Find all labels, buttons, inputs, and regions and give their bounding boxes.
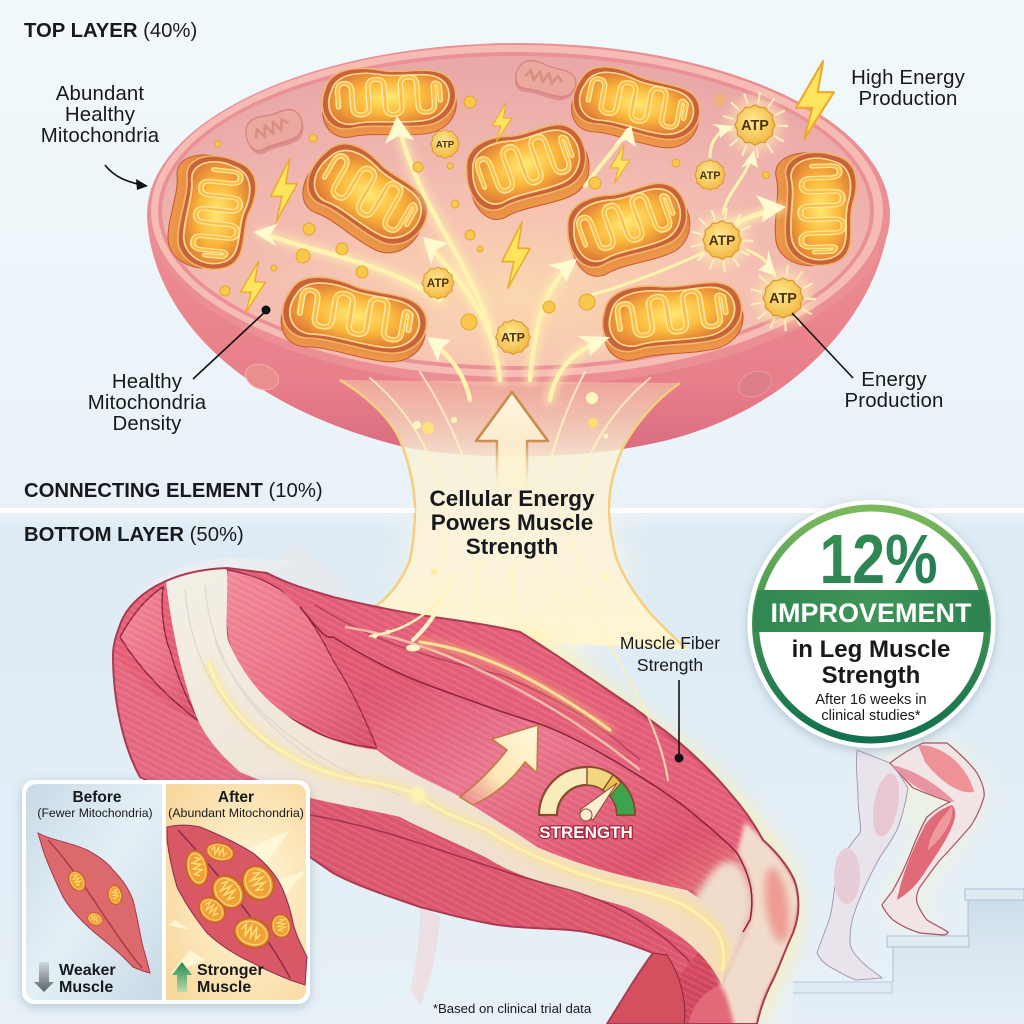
mitochondrion: centre right	[557, 169, 699, 285]
ATP badges: ATP	[427, 278, 449, 290]
ATP badges	[422, 98, 810, 354]
text: stronger muscle: Muscle	[197, 979, 251, 996]
heading: bottom layer: BOTTOM LAYER (50%)	[24, 524, 244, 546]
text: weaker muscle: Muscle	[59, 979, 113, 996]
heading: top layer: TOP LAYER (40%)	[24, 20, 197, 42]
panel: cell cross-section dish	[147, 43, 890, 456]
label: muscle fiber strength	[620, 633, 720, 762]
badge: 12% improvement: IMPROVEMENT	[770, 598, 972, 628]
white tendon band	[165, 567, 732, 985]
ATP badges: ATP	[741, 118, 769, 134]
text: after: After	[218, 789, 254, 806]
rear leg	[817, 750, 908, 980]
ATP badges: ATP	[436, 140, 454, 151]
lightning bolts	[240, 61, 834, 312]
label: high energy production: Production	[859, 88, 957, 110]
heading: connecting element: CONNECTING ELEMENT (10%)	[24, 480, 323, 502]
mitochondrion: far left	[165, 152, 259, 273]
label: high energy production: High Energy	[851, 67, 966, 89]
hip muscle	[226, 570, 377, 748]
text: before: (Fewer Mitochondria)	[37, 806, 153, 820]
ATP badges: ATP	[709, 233, 735, 248]
strength arrow in muscle	[460, 725, 538, 805]
ATP vesicles	[215, 94, 770, 330]
golden energy line core	[208, 660, 724, 970]
label: healthy mitochondria density: Mitochondria	[88, 392, 207, 414]
label: abundant healthy mitochondria: Abundant	[56, 83, 144, 105]
mitochondrion: bottom right	[597, 271, 748, 366]
text: stronger muscle: Stronger	[197, 962, 264, 979]
central caption: Strength	[466, 534, 558, 559]
text: weaker muscle	[59, 962, 116, 996]
before muscle	[38, 833, 150, 973]
label: healthy mitochondria density: Healthy	[112, 371, 183, 393]
icon: down arrow	[34, 962, 54, 992]
pale hip and body behind thigh	[120, 540, 440, 1005]
energy flow arrows	[253, 116, 786, 400]
badge: 12% improvement: After 16 weeks in	[815, 692, 927, 708]
label: energy production: Production	[845, 390, 943, 412]
text: before	[37, 789, 153, 820]
badge: 12% improvement	[748, 500, 996, 748]
label: healthy mitochondria density	[88, 306, 270, 435]
central caption	[429, 486, 595, 559]
after panel	[166, 784, 306, 1000]
strength gauge	[539, 767, 635, 842]
footnote: *Based on clinical trial data	[433, 1001, 592, 1016]
ATP badges: ATP	[501, 330, 525, 344]
label: healthy mitochondria density: Density	[112, 413, 182, 435]
knee outer cap	[720, 822, 799, 1024]
label: energy production	[792, 313, 943, 412]
icon: up arrow	[172, 962, 192, 992]
label: abundant healthy mitochondria	[41, 83, 160, 190]
runner legs	[817, 743, 988, 980]
label: muscle fiber strength: Strength	[637, 655, 703, 675]
ATP badges: ATP	[769, 291, 797, 307]
upper left muscle head	[120, 587, 200, 722]
text: stronger muscle	[197, 962, 264, 996]
divider line	[0, 508, 1024, 513]
mitochondrion: top left	[320, 62, 458, 141]
leg muscle illustration	[100, 550, 820, 1024]
label: muscle fiber strength: Muscle Fiber	[620, 633, 720, 653]
mitochondrion: far right	[773, 151, 859, 267]
strength gauge: STRENGTH	[539, 823, 633, 842]
lower thigh band	[441, 870, 698, 975]
label: abundant healthy mitochondria: Healthy	[65, 104, 136, 126]
mitochondrion: centre top	[456, 110, 599, 228]
central caption: Cellular Energy	[429, 486, 595, 511]
mitochondrion: faded left	[241, 102, 308, 159]
leg outline	[113, 568, 798, 1024]
badge: 12% improvement: clinical studies*	[821, 708, 921, 724]
badge: 12% improvement: in Leg Muscle	[792, 636, 950, 663]
text: after	[168, 789, 304, 820]
lower leg red muscles	[610, 952, 686, 1023]
connecting energy funnel	[335, 372, 690, 660]
stairs	[793, 889, 1024, 1024]
text: after: (Abundant Mitochondria)	[168, 806, 304, 820]
panel: before and after inset	[22, 780, 310, 1004]
top quad strip	[282, 590, 759, 852]
lower left muscle head	[114, 653, 249, 780]
label: abundant healthy mitochondria: Mitochondria	[41, 125, 160, 147]
badge: 12% improvement: 12%	[820, 520, 938, 598]
energy streams over thigh	[370, 575, 668, 803]
text: weaker muscle: Weaker	[59, 962, 116, 979]
mitochondrion: faded top	[513, 58, 579, 103]
mitochondrion: centre left	[292, 132, 441, 265]
big belly muscle	[360, 680, 752, 920]
central caption: Powers Muscle	[431, 510, 593, 535]
label: energy production: Energy	[861, 369, 927, 391]
golden energy line glow	[208, 660, 724, 970]
front leg	[882, 743, 984, 935]
mitochondrion: top right	[567, 61, 705, 153]
main upward arrow	[476, 392, 548, 488]
after rays	[168, 830, 306, 975]
text: before: Before	[72, 789, 122, 806]
badge: 12% improvement: Strength	[822, 662, 920, 689]
knee cream fade	[688, 861, 752, 985]
label: high energy production	[851, 67, 966, 110]
after muscle	[167, 825, 307, 985]
leg glow	[520, 632, 793, 1024]
before panel	[26, 784, 162, 1000]
ATP badges: ATP	[699, 170, 721, 182]
mitochondrion: bottom left	[277, 272, 431, 367]
